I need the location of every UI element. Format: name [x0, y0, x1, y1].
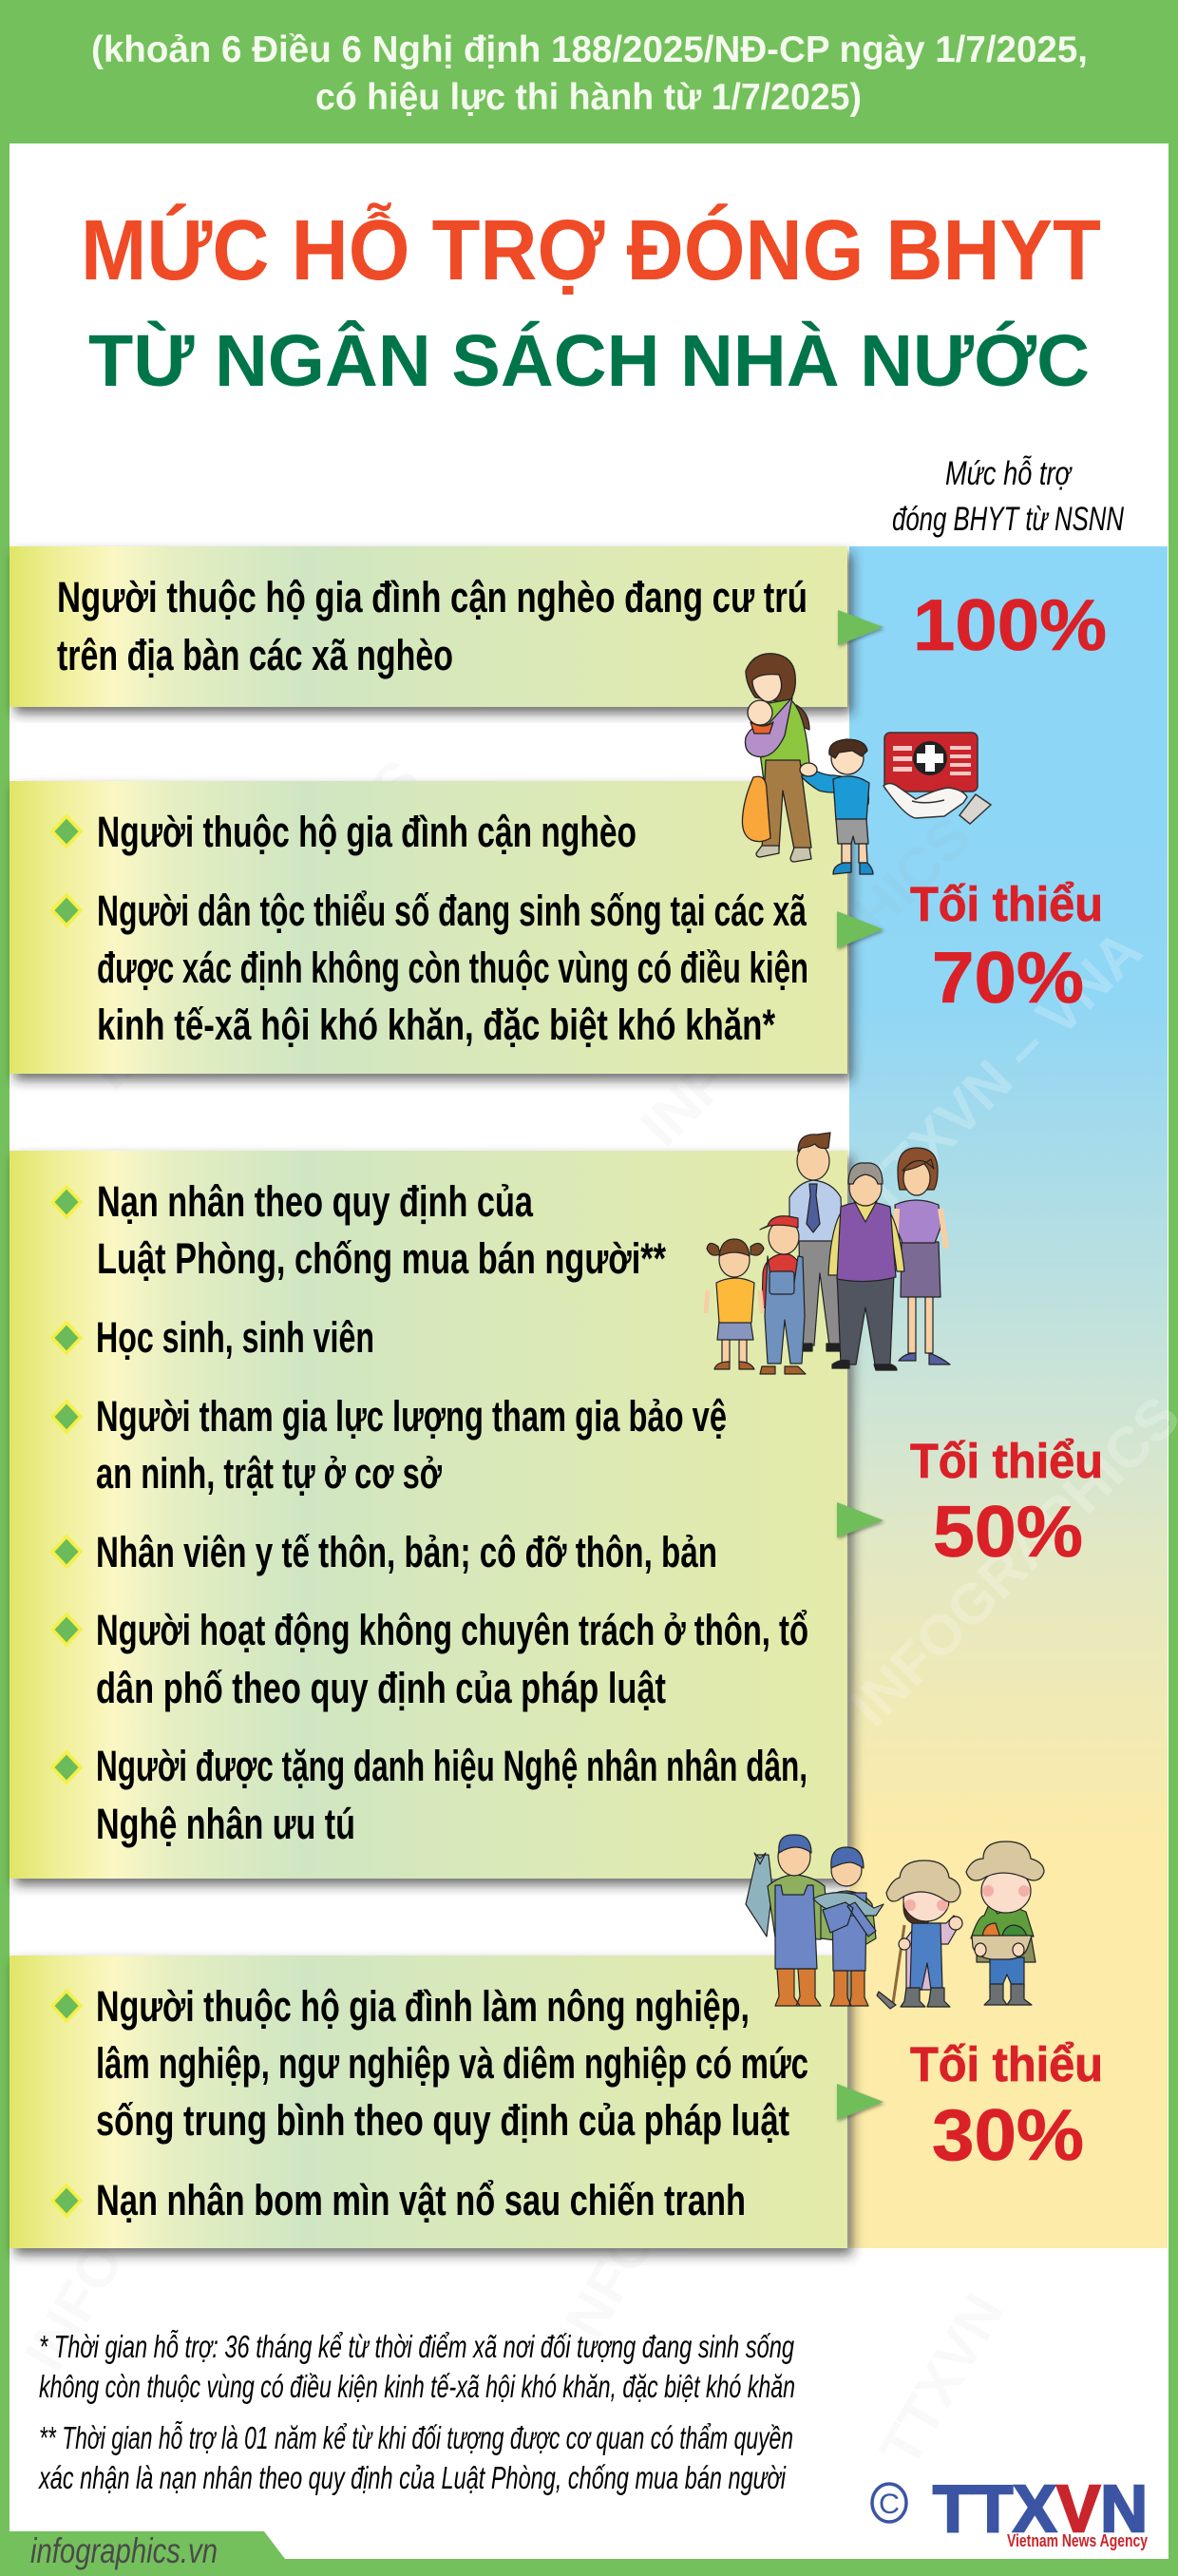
value: minimum 30%: 30%: [932, 2095, 1084, 2176]
footnotes: [38, 2329, 795, 2495]
footnotes: không còn thuộc vùng có điều kiện kinh tế-xã hội khó khăn, đặc biệt khó khăn: [39, 2369, 795, 2404]
arrow: 50%: [837, 1502, 884, 1537]
title: MỨC HỖ TRỢ ĐÓNG BHYT: [81, 201, 1101, 298]
column heading: [892, 455, 1125, 538]
panel: group 100%: [10, 546, 847, 707]
logo: TTXVN Vietnam News Agency: TTXVN: [933, 2471, 1148, 2546]
grandfather: [828, 1163, 904, 1370]
panel: group 50%: Người hoạt động không chuyên trách ở thôn, tổ: [96, 1606, 808, 1654]
footnotes: xác nhận là nạn nhân theo quy định của Luật Phòng, chống mua bán người: [38, 2460, 787, 2495]
title: [81, 201, 1101, 402]
arrow: 30%: [837, 2084, 884, 2120]
support-level column background: [849, 546, 1168, 2248]
panel: group 50%: dân phố theo quy định của pháp luật: [96, 1664, 666, 1712]
man: [789, 1133, 843, 1351]
value: minimum 50%: Tối thiểu: [910, 1434, 1103, 1488]
panel: group 100%: Người thuộc hộ gia đình cận nghèo đang cư trú: [57, 573, 808, 621]
panel: group 70%: [10, 781, 847, 1074]
bullet: [52, 1614, 81, 1645]
panel: group 70%: Người thuộc hộ gia đình cận nghèo: [97, 808, 636, 856]
panel: group 70%: được xác định không còn thuộc vùng có điều kiện: [97, 944, 808, 992]
value: minimum 30%: Tối thiểu: [910, 2037, 1103, 2091]
bullet: [52, 1752, 81, 1783]
boy with red cap: [760, 1216, 806, 1374]
illustration: mother with baby and boy: [742, 654, 873, 874]
panel: group 50%: Luật Phòng, chống mua bán người**: [97, 1234, 666, 1283]
bullet: [52, 1323, 81, 1353]
value: minimum 70%: 70%: [932, 938, 1084, 1019]
value: minimum 30%: [910, 2037, 1103, 2176]
watermark: INFOGRAPHICS: [249, 1460, 602, 1814]
column heading: Mức hỗ trợ: [945, 455, 1073, 492]
watermark: INFOGRAPHICS: [12, 1972, 286, 2381]
panel: group 30%: sống trung bình theo quy định của pháp luật: [96, 2096, 789, 2145]
bullet: [52, 816, 81, 847]
panel: group 50%: Học sinh, sinh viên: [96, 1313, 374, 1362]
panel: group 30%: [10, 1956, 847, 2248]
bullet: [52, 2185, 81, 2216]
panel: group 70%: kinh tế-xã hội khó khăn, đặc biệt khó khăn*: [97, 1001, 775, 1049]
value: minimum 50%: 50%: [933, 1492, 1083, 1573]
watermark: INFOGRAPHICS: [544, 1953, 818, 2362]
footnotes: ** Thời gian hỗ trợ là 01 năm kể từ khi đối tượng được cơ quan có thẩm quyền: [39, 2420, 793, 2455]
header: legal reference: [91, 29, 1088, 118]
panel: group 50%: Người tham gia lực lượng tham gia bảo vệ: [96, 1392, 727, 1441]
header: legal reference: (khoản 6 Điều 6 Nghị định 188/2025/NĐ-CP ngày 1/7/2025,: [91, 29, 1088, 70]
fisher 2: [813, 1847, 884, 2006]
watermark: INFOGRAPHICS: [629, 805, 982, 1158]
header: legal reference: có hiệu lực thi hành từ 1/7/2025): [315, 77, 862, 118]
watermark: TTXVN: [867, 2283, 1016, 2476]
panel: group 30%: Nạn nhân bom mìn vật nổ sau chiến tranh: [96, 2176, 746, 2224]
title: TỪ NGÂN SÁCH NHÀ NƯỚC: [88, 319, 1090, 402]
illustration: fishers and farmers: [746, 1835, 1044, 2009]
watermark: TTXVN – VNA: [847, 918, 1154, 1225]
bullet: [52, 895, 81, 925]
bullet: [52, 1991, 81, 2021]
arrow: 100%: [838, 610, 884, 645]
panel: group 50%: Nhân viên y tế thôn, bản; cô đỡ thôn, bản: [96, 1528, 717, 1576]
bullet: [52, 1187, 81, 1217]
panel: group 50%: Nạn nhân theo quy định của: [97, 1177, 534, 1226]
bullet: [52, 1536, 81, 1567]
value: minimum 50%: [910, 1434, 1103, 1573]
bullet: [52, 1402, 81, 1432]
panel: group 50%: [10, 1151, 847, 1879]
panel: group 30%: Người thuộc hộ gia đình làm nông nghiệp,: [96, 1982, 750, 2031]
girl: [706, 1239, 764, 1369]
panel: group 100%: trên địa bàn các xã nghèo: [57, 631, 453, 679]
footnotes: * Thời gian hỗ trợ: 36 tháng kể từ thời điểm xã nơi đối tượng đang sinh sống: [39, 2329, 794, 2364]
value: minimum 70%: Tối thiểu: [910, 877, 1103, 931]
woman: [895, 1148, 950, 1364]
fisher 1: [746, 1835, 828, 2006]
panel: group 50%: Nghệ nhân ưu tú: [96, 1800, 355, 1848]
panel: group 50%: Người được tặng danh hiệu Nghệ nhân nhân dân,: [96, 1742, 808, 1790]
value: 100%: 100%: [913, 585, 1107, 666]
arrow: 70%: [837, 911, 884, 948]
panel: group 70%: Người dân tộc thiểu số đang sinh sống tại các xã: [97, 887, 808, 935]
logo: TTXVN Vietnam News Agency: C: [879, 2489, 900, 2520]
panel: group 30%: lâm nghiệp, ngư nghiệp và diêm nghiệp có mức: [96, 2039, 808, 2088]
value: minimum 70%: [910, 877, 1103, 1019]
watermark: [12, 748, 1178, 2476]
man farmer: [966, 1841, 1044, 2005]
icon: hand holding health card: [884, 733, 991, 824]
watermark: INFOGRAPHICS: [78, 748, 431, 1101]
panel: group 50%: an ninh, trật tự ở cơ sở: [96, 1449, 442, 1498]
footer tab: infographics.vn: infographics.vn: [30, 2531, 218, 2570]
woman farmer: [877, 1860, 962, 2009]
illustration: family: [706, 1133, 950, 1374]
